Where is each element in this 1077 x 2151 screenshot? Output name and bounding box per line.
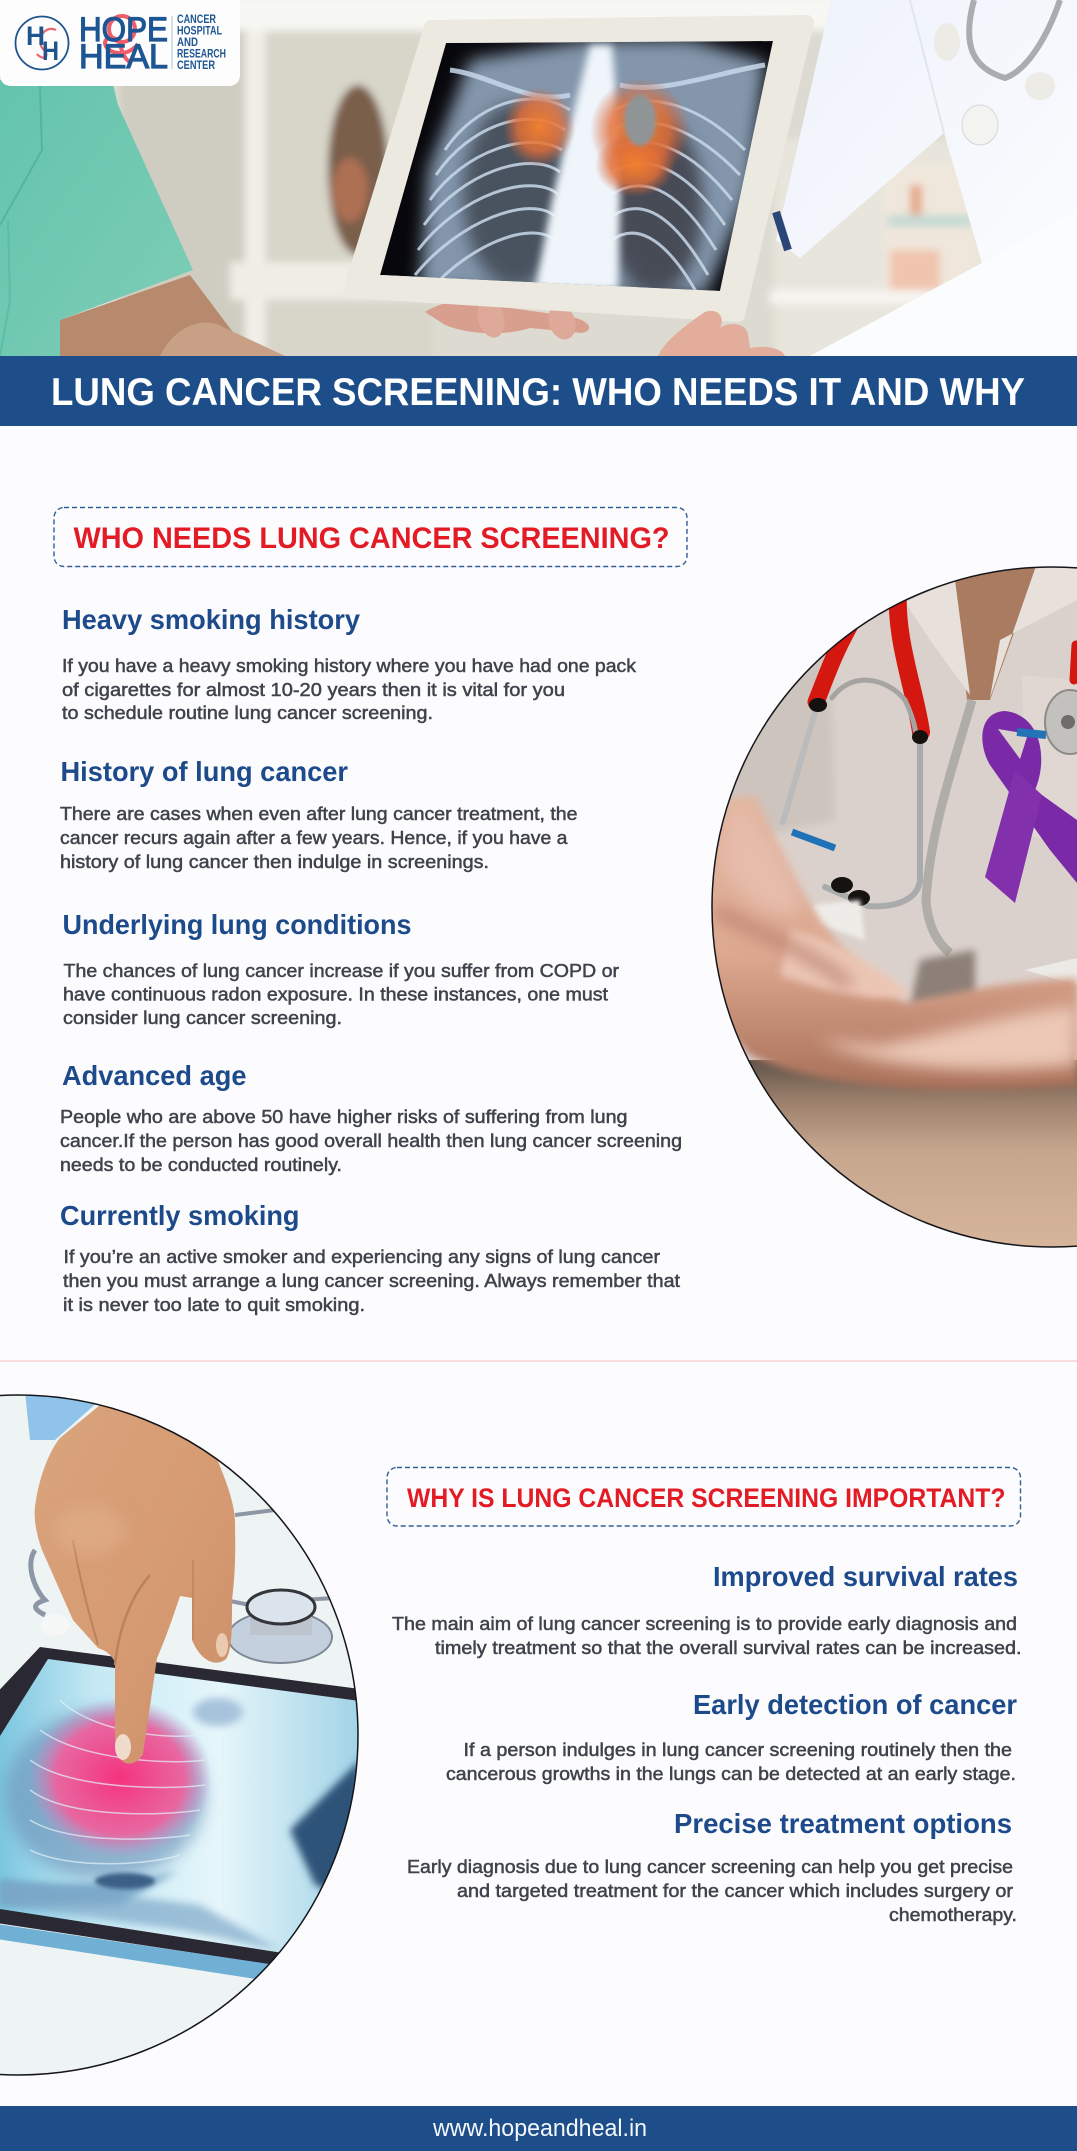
- table: [749, 1060, 1077, 1246]
- tablet frame: [0, 1647, 360, 1978]
- chest piece: [1045, 690, 1077, 754]
- title banner: LUNG CANCER SCREENING: WHO NEEDS IT AND WHY: [51, 371, 1025, 414]
- stethoscope: [969, 0, 1060, 78]
- item: precise treatment options: Early diagnosis due to lung cancer screening can help you get precise: [407, 1856, 1013, 1877]
- tablet: [350, 22, 807, 315]
- item: early detection of cancer: Early detection of cancer: [693, 1689, 1017, 1720]
- logo wordmark: [79, 11, 172, 76]
- pocket: [1022, 675, 1077, 845]
- section heading: who needs screening: [54, 508, 687, 566]
- item: currently smoking: If you’re an active smoker and experiencing any signs of lung cancer: [64, 1246, 660, 1267]
- footer band with website: www.hopeandheal.in: [432, 2115, 647, 2142]
- item: improved survival rates: [392, 1561, 1022, 1658]
- item: history of lung cancer: history of lung cancer then indulge in screenings.: [60, 851, 489, 872]
- logo wordmark: HOPE: [79, 11, 168, 49]
- white background behind hand: [812, 900, 865, 940]
- sleeve: [25, 1396, 95, 1440]
- item: history of lung cancer: cancer recurs again after a few years. Hence, if you have a: [60, 827, 568, 848]
- item: underlying lung conditions: [62, 909, 619, 1028]
- item: improved survival rates: The main aim of lung cancer screening is to provide early diagnosis and: [392, 1613, 1017, 1634]
- logo tagline: CANCER: [177, 14, 217, 26]
- patient scrubs: [0, 80, 193, 356]
- patient arm: [60, 275, 285, 356]
- x-ray screen: [380, 40, 773, 295]
- item: heavy smoking history: If you have a heavy smoking history where you have had one pack: [62, 655, 637, 676]
- photo circle: finger pointing at lung x-ray on tablet: [0, 1390, 370, 2090]
- section heading: who needs screening: WHO NEEDS LUNG CANCER SCREENING?: [74, 522, 670, 555]
- item: currently smoking: [60, 1200, 680, 1315]
- item: underlying lung conditions: The chances of lung cancer increase if you suffer from COPD or: [64, 960, 619, 981]
- logo emblem: [16, 16, 68, 70]
- left hand behind tablet: [425, 304, 590, 340]
- item: precise treatment options: chemotherapy.: [889, 1904, 1017, 1925]
- doctor coat: [776, 0, 1077, 356]
- item: currently smoking: it is never too late to quit smoking.: [63, 1294, 365, 1315]
- neck: [955, 568, 1036, 700]
- item: heavy smoking history: to schedule routine lung cancer screening.: [62, 702, 433, 723]
- section divider: [0, 1360, 1077, 1362]
- footer band with website: [0, 2106, 1077, 2151]
- ribbon: [982, 711, 1077, 903]
- dark fold under coat: [910, 950, 975, 1005]
- item: heavy smoking history: [62, 604, 637, 723]
- item: advanced age: Advanced age: [62, 1060, 246, 1091]
- photo circle outline: [0, 1395, 358, 2075]
- item: currently smoking: then you must arrange a lung cancer screening. Always remember that: [63, 1270, 680, 1291]
- item: advanced age: People who are above 50 have higher risks of suffering from lung: [60, 1106, 628, 1127]
- item: history of lung cancer: History of lung cancer: [60, 756, 348, 787]
- item: underlying lung conditions: consider lung cancer screening.: [63, 1007, 342, 1028]
- item: advanced age: [60, 1060, 682, 1175]
- item: precise treatment options: [407, 1808, 1017, 1925]
- arm and blurred hand: [705, 795, 1077, 1090]
- photo circle: nurse with purple ribbon: [700, 560, 1077, 1260]
- stethoscope on desk: [31, 1510, 335, 1663]
- logo tagline: CENTER: [177, 60, 216, 72]
- item: advanced age: cancer.If the person has good overall health then lung cancer screening: [60, 1130, 682, 1151]
- item: early detection of cancer: cancerous growths in the lungs can be detected at an early stage.: [446, 1763, 1016, 1784]
- logo emblem: H: [42, 36, 59, 66]
- logo emblem: H: [26, 21, 45, 51]
- item: precise treatment options: Precise treatment options: [674, 1808, 1012, 1839]
- section heading: why screening is important: [387, 1468, 1020, 1526]
- item: underlying lung conditions: Underlying lung conditions: [62, 909, 412, 940]
- sleeve cuff: [1025, 958, 1077, 985]
- item: history of lung cancer: There are cases when even after lung cancer treatment, the: [60, 803, 578, 824]
- logo tagline: RESEARCH: [177, 48, 226, 60]
- section heading: why screening is important: WHY IS LUNG CANCER SCREENING IMPORTANT?: [407, 1483, 1006, 1513]
- item: currently smoking: Currently smoking: [60, 1200, 300, 1231]
- item: improved survival rates: Improved survival rates: [713, 1561, 1018, 1592]
- logo tagline: HOSPITAL: [177, 26, 222, 38]
- item: early detection of cancer: [446, 1689, 1017, 1784]
- item: underlying lung conditions: have continuous radon exposure. In these instances, one must: [63, 984, 608, 1004]
- logo tagline: AND: [177, 37, 198, 49]
- stethoscope tubes: [783, 590, 1076, 906]
- hand and pointing finger: [35, 1405, 235, 1764]
- photo circle outline: [712, 567, 1077, 1247]
- item: heavy smoking history: Heavy smoking history: [62, 604, 360, 635]
- logo card: [0, 0, 240, 86]
- title banner: [0, 356, 1077, 426]
- x-ray display: [0, 1659, 358, 1952]
- right hand holding tablet: [658, 311, 785, 356]
- logo wordmark: HEAL: [79, 38, 168, 76]
- zipper: [926, 700, 972, 953]
- item: history of lung cancer: [60, 756, 578, 872]
- item: improved survival rates: timely treatment so that the overall survival rates can be increased.: [435, 1637, 1022, 1658]
- hero photo: doctor showing chest x-ray on tablet: [0, 0, 1077, 370]
- item: advanced age: needs to be conducted routinely.: [60, 1154, 342, 1175]
- item: precise treatment options: and targeted treatment for the cancer which includes surgery or: [457, 1880, 1013, 1901]
- logo tagline: [177, 14, 226, 72]
- item: heavy smoking history: of cigarettes for almost 10-20 years then it is vital for you: [62, 679, 565, 700]
- item: early detection of cancer: If a person indulges in lung cancer screening routinely then the: [464, 1739, 1012, 1760]
